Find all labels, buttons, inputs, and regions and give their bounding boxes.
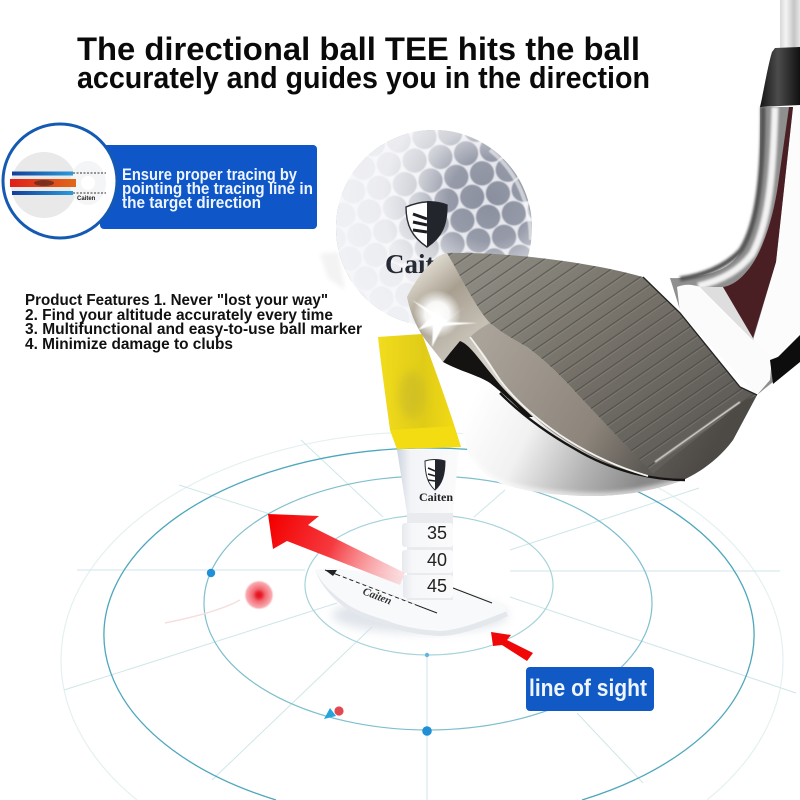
tip text: the target direction: [122, 194, 261, 212]
height block 45: 45: [427, 576, 447, 596]
target markers: [207, 569, 432, 736]
circular inset: ball with tracing lines: [3, 124, 117, 238]
sole highlight: [655, 402, 740, 462]
golf club: [407, 0, 800, 496]
stem logo shield: [425, 460, 445, 490]
height block 40: 40: [427, 550, 447, 570]
sole dark edge line: [500, 393, 685, 480]
tip text: pointing the tracing line in: [122, 180, 313, 198]
height block 35: 35: [427, 523, 447, 543]
pale strip beside the reflection: [700, 287, 753, 340]
white blade highlight: [677, 285, 772, 395]
dark red reflection: [723, 107, 793, 338]
grooved club face: [447, 253, 757, 473]
tip text: [122, 166, 313, 212]
label: line of sight: line of sight: [529, 675, 647, 702]
sole silver line: [470, 337, 648, 476]
dark edge reflection: [770, 335, 800, 384]
circular inset: ball with tracing lines: Caiten: [77, 196, 96, 202]
white right band: [753, 107, 800, 360]
arrow: line of sight: [491, 632, 533, 661]
tee stem with height scale: [397, 450, 459, 600]
product features text: [25, 292, 362, 353]
tee base brand: Caiten: [361, 586, 393, 608]
hosel and neck: [670, 107, 800, 395]
sole panel: [470, 323, 757, 480]
ball logo shield: [406, 201, 447, 247]
dark wedge under the toe: [443, 341, 533, 417]
title: [77, 31, 650, 95]
arrow: direction of travel: [268, 514, 405, 585]
toe and chrome rim: [407, 253, 533, 417]
shaft: [780, 0, 800, 50]
tee base with tracing line: [315, 568, 508, 636]
panel: tracing tip: [3, 124, 317, 238]
product features text: Product Features 1. Never "lost your way": [25, 292, 328, 309]
label: line of sight: [526, 667, 654, 711]
ball brand name: Caiten: [385, 249, 462, 279]
blue tip box: [100, 145, 317, 229]
title: accurately and guides you in the direction: [77, 60, 650, 95]
height block 40: [402, 550, 453, 573]
title: The directional ball TEE hits the ball: [77, 31, 640, 67]
height block 45: [403, 575, 453, 598]
height block 35: [402, 523, 453, 547]
specular star: [412, 290, 478, 347]
back of head: [428, 330, 757, 496]
face edge: [643, 277, 757, 395]
ferrule: [760, 47, 800, 107]
stem brand name: Caiten: [419, 490, 453, 504]
tip text: Ensure proper tracing by: [122, 166, 298, 184]
yellow tee cup: [378, 334, 461, 449]
product features text: 4. Minimize damage to clubs: [25, 336, 233, 353]
golf ball: [322, 130, 532, 324]
product features text: 3. Multifunctional and easy-to-use ball marker: [25, 321, 362, 338]
product features text: 2. Find your altitude accurately every time: [25, 307, 333, 324]
target rings on the ground: [61, 432, 796, 800]
